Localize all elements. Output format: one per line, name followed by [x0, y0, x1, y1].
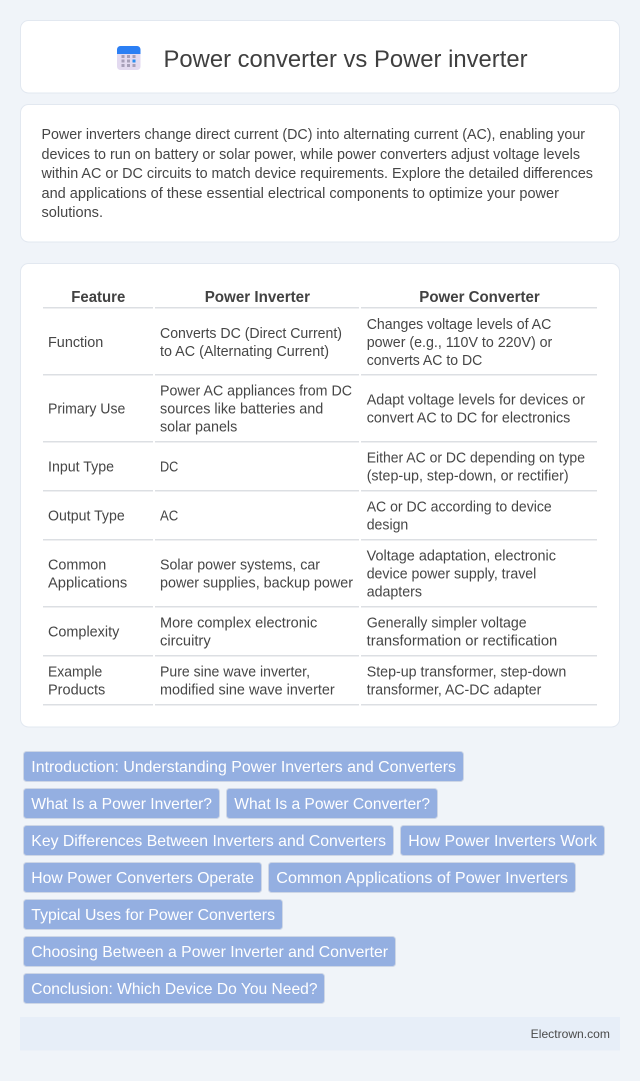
tag: Key Differences: Key Differences Between Inverters and Converters — [31, 833, 386, 850]
table row: Primary Use: Adapt voltage levels for devices or — [367, 392, 585, 408]
tag: Conclusion — [24, 974, 324, 1004]
table row: Output Type — [43, 500, 597, 540]
table row: Common Applications: power supplies, backup power — [160, 576, 353, 592]
tag: How Power Inverters Work — [400, 826, 604, 856]
tag: Introduction: Introduction: Understanding Power Inverters and Converters — [31, 759, 456, 776]
panel: header — [20, 20, 620, 93]
table row: Primary Use: sources like batteries and — [160, 402, 323, 418]
tag: Common Applications — [268, 862, 576, 892]
table row: Output Type: AC — [160, 508, 178, 524]
table row: Common Applications: Applications — [48, 576, 127, 592]
tag: Introduction — [24, 752, 464, 782]
table row: Common Applications: Solar power systems, car — [160, 558, 320, 574]
table row: Function: Converts DC (Direct Current) — [160, 326, 342, 342]
tag: What Is a Power Converter — [226, 788, 438, 818]
tag: Common Applications: Common Applications of Power Inverters — [276, 870, 568, 887]
table row: Common Applications — [43, 548, 597, 608]
table row: Output Type: Output Type — [48, 508, 125, 524]
table row: Example Products: Pure sine wave inverter, — [160, 664, 310, 680]
table row: Input Type: DC — [160, 460, 178, 476]
table row: Primary Use: Primary Use — [48, 402, 125, 418]
footer: Electrown.com — [531, 1027, 610, 1041]
table header row — [43, 289, 597, 308]
table row: Output Type: design — [367, 518, 408, 534]
tag: Choosing Between: Choosing Between a Power Inverter and Converter — [31, 944, 389, 961]
table row: Function: to AC (Alternating Current) — [160, 344, 329, 360]
tag: How Power Inverters Work: How Power Inverters Work — [408, 833, 598, 850]
table row: Primary Use: solar panels — [160, 420, 237, 436]
table row: Primary Use: Power AC appliances from DC — [160, 384, 352, 400]
table row: Example Products: modified sine wave inverter — [160, 682, 335, 698]
table row: Input Type: Input Type — [48, 460, 114, 476]
table row: Common Applications: Voltage adaptation, electronic — [367, 548, 556, 564]
icon: calendar grid — [117, 46, 140, 70]
tag: Key Differences — [24, 826, 394, 856]
title: Power converter vs Power inverter — [164, 46, 528, 73]
text block: intro paragraph: devices to run on battery or solar power, while power converters adjust voltage levels — [42, 147, 580, 163]
table row: Common Applications: Common — [48, 558, 106, 574]
table row: Complexity: transformation or rectification — [367, 634, 557, 650]
table row: Complexity: Complexity — [48, 624, 120, 640]
table row: Complexity — [43, 616, 597, 656]
text block: intro paragraph: Power inverters change direct current (DC) into alternating current (AC), enabling your — [42, 127, 585, 143]
table row: Example Products: Products — [48, 682, 105, 698]
panel: comparison table — [20, 264, 620, 727]
tag: What Is a Power Inverter: What Is a Power Inverter? — [31, 796, 212, 813]
table row: Input Type: (step-up, step-down, or rectifier) — [367, 468, 569, 484]
table row: Function — [43, 317, 597, 376]
panel: introduction — [20, 104, 620, 242]
table row: Example Products — [43, 664, 597, 706]
tag: What Is a Power Inverter — [24, 788, 220, 818]
table header row: Power Converter — [419, 289, 540, 306]
panel: section links — [24, 752, 604, 1004]
text block: intro paragraph: solutions. — [42, 205, 103, 221]
tag: How Power Converters Operate — [24, 862, 262, 892]
table row: Function: Function — [48, 335, 103, 351]
table row: Common Applications: adapters — [367, 584, 422, 600]
tag: How Power Converters Operate: How Power Converters Operate — [31, 870, 254, 887]
table row: Output Type: AC or DC according to device — [367, 500, 552, 516]
text block: intro paragraph: and applications of these essential electrical components to optimize your power — [42, 186, 559, 202]
table header row: Feature — [71, 289, 125, 306]
table row: Input Type — [43, 450, 597, 492]
tag: What Is a Power Converter: What Is a Power Converter? — [234, 796, 430, 813]
tag: Typical Uses — [24, 900, 282, 930]
tag: Typical Uses: Typical Uses for Power Converters — [31, 907, 275, 924]
footer — [20, 1017, 620, 1050]
text block: intro paragraph: within AC or DC circuits to match device requirements. Explore the detailed differences — [41, 166, 593, 182]
table header row: Power Inverter — [205, 289, 310, 306]
table row: Complexity: More complex electronic — [160, 616, 317, 632]
table row: Example Products: Step-up transformer, step-down — [367, 664, 566, 680]
tag: Choosing Between — [24, 936, 396, 966]
table row: Complexity: Generally simpler voltage — [367, 616, 527, 632]
table row: Common Applications: device power supply, travel — [367, 566, 536, 582]
table row: Function: converts AC to DC — [367, 353, 482, 369]
table row: Function: power (e.g., 110V to 220V) or — [367, 335, 553, 351]
table row: Input Type: Either AC or DC depending on type — [367, 450, 585, 466]
table row: Primary Use: convert AC to DC for electronics — [367, 410, 570, 426]
table row: Example Products: transformer, AC-DC adapter — [367, 682, 541, 698]
table row: Example Products: Example — [48, 664, 102, 680]
table row: Function: Changes voltage levels of AC — [367, 317, 551, 333]
text block: intro paragraph — [41, 127, 593, 221]
table row: Primary Use — [43, 384, 597, 442]
tag: Conclusion: Conclusion: Which Device Do You Need? — [31, 981, 318, 998]
table row: Complexity: circuitry — [160, 634, 212, 650]
